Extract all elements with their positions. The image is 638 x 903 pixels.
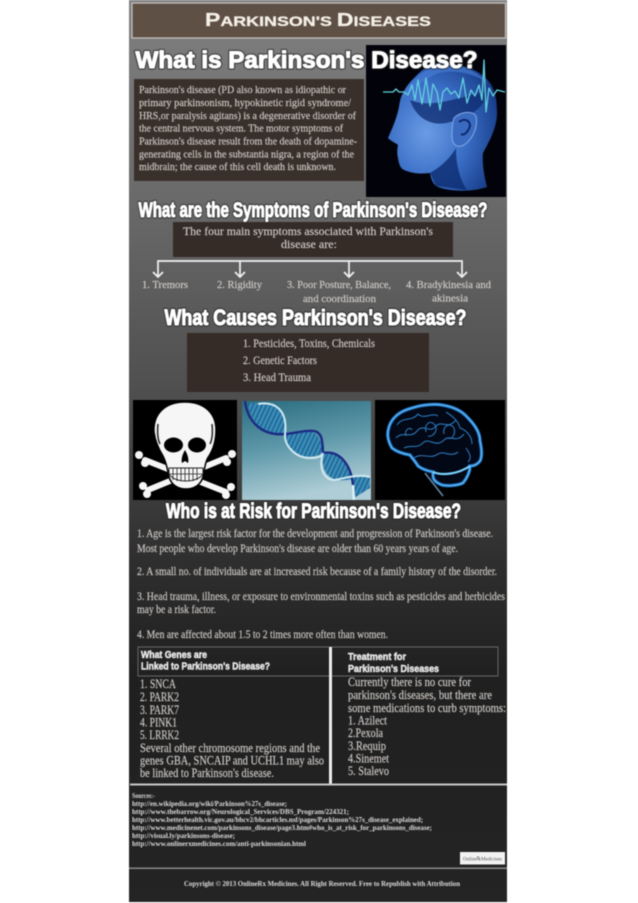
genes list: 5. LRRK2 (140, 728, 179, 742)
panel: definition text: the central nervous system. The motor symptoms of (139, 124, 343, 134)
treatment list: Currently there is no cure for (348, 675, 472, 689)
title banner: PARKINSON'S D ISEASES (205, 10, 431, 30)
treatment list: 3.Requip (348, 739, 386, 753)
symptom labels: and coordination (303, 294, 377, 305)
treatment list: 1. Azilect (348, 714, 387, 728)
genes list: 1. SNCA (140, 677, 176, 691)
risk factors text: 1. Age is the largest risk factor for the development and progression of Parkinson's disease. (137, 528, 493, 540)
logo: Online Rx Medicines (460, 852, 505, 864)
sources: http://www.medicinenet.com/parkinsons_disease/page3.htm#who_is_at_risk_for_parkinsons_disease; (132, 823, 432, 832)
sources: http://www.onlinerxmedicines.com/anti-parkinsonian.html (132, 839, 306, 848)
header box: genes and treatment: Linked to Parkinson's Disease? (141, 660, 270, 672)
panel: symptoms intro: disease are: (281, 239, 337, 251)
treatment list: some medications to curb symptoms: (348, 701, 506, 715)
risk factors text: 4. Men are affected about 1.5 to 2 times more often than women. (137, 629, 388, 641)
genes list: genes GBA, SNCAIP and UCHL1 may also (140, 754, 324, 768)
sources: http://visual.ly/parkinsons-disease; (132, 831, 235, 840)
risk factors text: 2. A small no. of individuals are at increased risk because of a family history of the disorder. (137, 566, 497, 578)
panel: causes (187, 333, 429, 392)
copyright: Copyright © 2013 OnlineRx Medicines. All Right Reserved. Free to Republish with Attribution (184, 879, 461, 888)
sources: http://en.wikipedia.org/wiki/Parkinson%27s_disease; (132, 799, 287, 808)
risk factors text: 3. Head trauma, illness, or exposure to environmental toxins such as pesticides and herbicides (137, 591, 505, 603)
heading: What is Parkinson's Disease?: What is Parkinson's Disease? (136, 47, 478, 74)
heading: Who is at Risk: Who is at Risk for Parkinson's Disease? (166, 500, 461, 523)
panel: definition text: Parkinson's disease (PD also known as idiopathic or (139, 85, 346, 96)
treatment list (348, 675, 506, 778)
panel: causes: 2. Genetic Factors (243, 355, 317, 367)
symptom labels: 3. Poor Posture, Balance, (287, 280, 391, 291)
genes list (140, 677, 324, 780)
heading: What are the Symptoms: What are the Symptoms of Parkinson's Disease? (138, 199, 488, 222)
header box: genes and treatment: Parkinson's Diseases (348, 663, 439, 675)
heading: What are the Symptoms: What are the Symptoms of Parkinson's Disease? (138, 199, 488, 222)
footer divider (129, 868, 507, 869)
panel: causes: 3. Head Trauma (243, 372, 311, 384)
genes list: be linked to Parkinson's disease. (140, 766, 274, 780)
title banner (132, 3, 506, 38)
genes list: 3. PARK7 (140, 703, 179, 717)
risk factors text (137, 528, 505, 641)
sources: http://www.thebarrow.org/Neurological_Services/DBS_Program/224321; (132, 807, 349, 816)
arrows: symptom branches (153, 261, 467, 277)
horizontal divider (130, 784, 507, 786)
risk factors text: may be a risk factor. (137, 604, 216, 616)
panel: definition text: Parkinson's disease result from the death of dopamine- (139, 136, 357, 148)
symptom labels: 2. Rigidity (217, 280, 263, 291)
panel: causes: 1. Pesticides, Toxins, Chemicals (243, 338, 375, 350)
genes list: Several other chromosome regions and the (140, 741, 320, 755)
panel: definition text: generating cells in the substantia nigra, a region of the (139, 150, 354, 160)
heading: What Causes: What Causes Parkinson's Disease? (164, 305, 466, 330)
symptom labels: 1. Tremors (142, 280, 188, 291)
risk factors text: Most people who develop Parkinson's disease are older than 60 years years of age. (137, 543, 458, 555)
image: blue head with ECG line (366, 45, 506, 197)
panel: symptoms intro: The four main symptoms associated with Parkinson's (183, 226, 434, 238)
genes list: 4. PINK1 (140, 716, 177, 730)
heading: What is Parkinson's Disease?: What is Parkinson's Disease? (136, 47, 478, 74)
treatment list: 2.Pexola (348, 726, 383, 740)
panel: definition text: primary parkinsonism, hypokinetic rigid syndrome/ (139, 98, 351, 109)
symptom labels: 4. Bradykinesia and (406, 280, 492, 291)
logo: Online Rx Medicines: Online℞Medicines (463, 856, 502, 862)
image: glowing brain (375, 400, 505, 500)
genes list: 2. PARK2 (140, 690, 179, 704)
header box: genes and treatment (138, 647, 498, 676)
heading: What Causes: What Causes Parkinson's Disease? (164, 305, 466, 330)
panel: definition text: HRS,or paralysis agitans) is a degenerative disorder of (139, 111, 356, 122)
sources (132, 791, 432, 848)
heading: Who is at Risk: Who is at Risk for Parkinson's Disease? (166, 500, 461, 523)
panel: symptoms intro (173, 222, 453, 257)
header box: genes and treatment: What Genes are (141, 649, 207, 661)
symptom labels (142, 280, 492, 305)
symptom labels: akinesia (432, 294, 468, 304)
panel: definition text: midbrain; the cause of this cell death is unknown. (139, 162, 336, 173)
sources: Sources:- (132, 791, 155, 800)
header box: genes and treatment: Treatment for (348, 651, 406, 663)
image: skull and crossbones (133, 400, 237, 500)
treatment list: 4.Sinemet (348, 752, 389, 766)
treatment list: 5. Stalevo (348, 764, 389, 778)
column divider (329, 647, 332, 784)
treatment list: parkinson's diseases, but there are (348, 688, 492, 702)
page panel background (129, 0, 507, 902)
panel: definition text (134, 79, 364, 181)
sources: http://www.betterhealth.vic.gov.au/bhcv2/bhcarticles.nsf/pages/Parkinson%27s_disease_explained; (132, 815, 423, 824)
image: DNA helix (242, 401, 371, 500)
